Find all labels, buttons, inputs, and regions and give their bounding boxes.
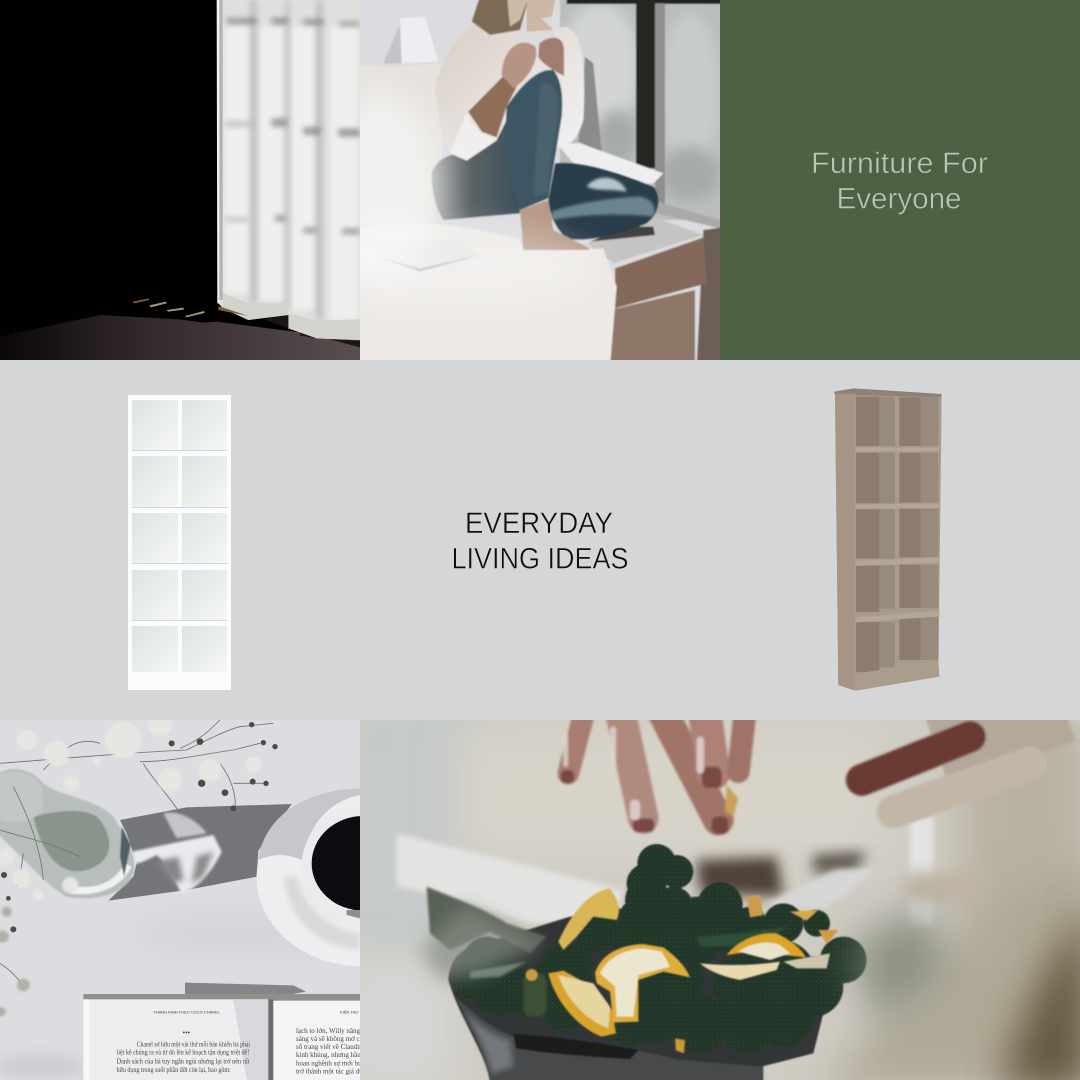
left leaves (427, 887, 790, 1017)
photo: table with flowers, coffee and book (0, 720, 360, 1080)
book text: THANH KINH THEO COCO CHANEL (153, 1009, 221, 1014)
woman (432, 0, 658, 255)
lemon slices (526, 888, 838, 1053)
fork (767, 868, 877, 908)
icon: wooden bookshelf (834, 388, 942, 691)
open book (83, 983, 383, 1080)
sofa base (656, 204, 720, 229)
book text: sáng và sẽ không mở cửa cho (296, 1035, 379, 1043)
white pillow (557, 143, 663, 187)
book text: hoan nghênh sự mới bước đi (296, 1059, 376, 1067)
foreground blur right (820, 860, 1080, 1080)
window (560, 0, 727, 220)
book text: Chanel sở hữu một vài thứ mỗi bàn khiến bà phải (137, 1040, 250, 1048)
book text: Danh sách của bà tuy ngắn ngủi nhưng lại trở nên rất (117, 1057, 249, 1065)
cast iron bowl (448, 917, 830, 1080)
coffee cup and saucer (256, 788, 360, 966)
glass vase (0, 769, 134, 898)
panel: grey product band (0, 360, 1080, 720)
book text: hữu dụng trong suốt phần đời còn lại, bao gồm: (117, 1066, 231, 1074)
book text: KIẾN TẠO (340, 1009, 359, 1014)
heading: Furniture For Everyone: Furniture For (811, 147, 988, 180)
right hand (862, 707, 1063, 902)
heading: Furniture For Everyone (811, 147, 988, 216)
panel: green title (720, 0, 1080, 360)
book text: ●●● (183, 1029, 191, 1034)
haze (360, 96, 456, 268)
table slab (397, 833, 622, 923)
shadow of vase (108, 804, 292, 901)
background shapes (697, 857, 783, 897)
grey cushion (578, 57, 602, 152)
heading: Everyday Living Ideas: EVERYDAY (465, 507, 613, 540)
caustic light (132, 835, 222, 893)
book text: lạch to lớn, Willy năng nhắc (296, 1027, 375, 1035)
sofa cushions (360, 64, 442, 163)
flowering branches (0, 713, 278, 1016)
book text: liệt kê chúng ra và từ đó lên kế hoạch tận dụng triệt để! (117, 1049, 249, 1057)
book text: kinh khủng, nhưng hầu hết c (296, 1051, 376, 1059)
photo: woman on sofa with mug (360, 0, 720, 360)
photo: hands and salad bowl (340, 700, 1080, 1080)
heading: Everyday Living Ideas: LIVING IDEAS (452, 542, 628, 576)
throw blanket (353, 223, 617, 367)
greens (453, 844, 867, 1053)
icon: white bookshelf (127, 395, 232, 692)
book text: số trang viết về Claudine trong (296, 1043, 383, 1051)
book text: trở thành một tác giả được (296, 1067, 370, 1075)
left hand fingers (561, 713, 745, 834)
photo: dark room with curtains (0, 0, 360, 360)
book text (117, 1009, 383, 1075)
heading: Furniture For Everyone: Everyone (836, 182, 962, 216)
heading: Everyday Living Ideas (452, 507, 628, 576)
